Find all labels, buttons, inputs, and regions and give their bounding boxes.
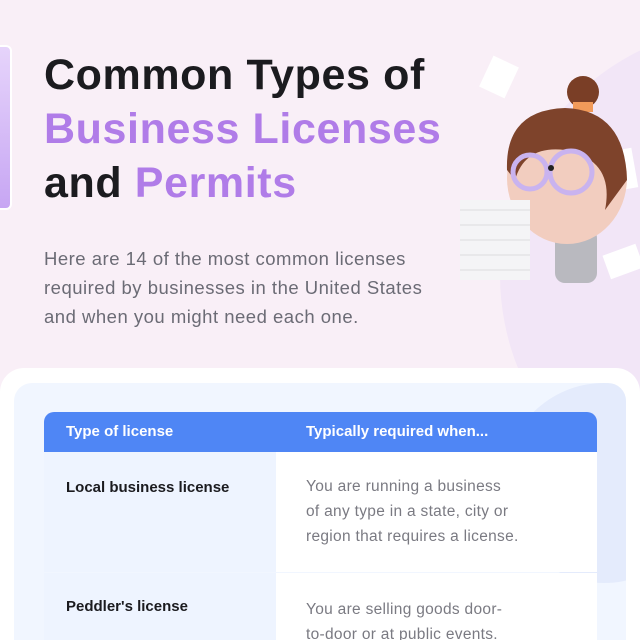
table header: Typically required when... (306, 423, 488, 440)
row: local business license: You are running a business (306, 478, 501, 495)
title: Business Licenses (44, 105, 441, 153)
intro text: Here are 14 of the most common licenses (44, 248, 406, 269)
row: local business license: region that requires a license. (306, 528, 519, 545)
inner panel (14, 383, 626, 640)
row: local business license: of any type in a state, city or (306, 503, 508, 520)
table (44, 412, 597, 640)
title: Common Types of (44, 51, 425, 99)
side accent bar (0, 45, 12, 210)
row: peddler's license: Peddler's license (66, 598, 188, 615)
background arc (500, 25, 640, 525)
intro text (44, 248, 422, 327)
illustration: character with papers (460, 56, 640, 283)
table card (0, 368, 640, 640)
row: local business license (44, 452, 597, 572)
intro text: required by businesses in the United States (44, 277, 422, 298)
row: local business license: Local business license (66, 479, 229, 496)
row: peddler's license: You are selling goods door- (306, 601, 502, 618)
table header (44, 412, 597, 452)
table header: Type of license (66, 423, 173, 440)
title: and Permits (44, 159, 297, 207)
row: peddler's license (66, 573, 597, 640)
title (44, 51, 441, 207)
intro text: and when you might need each one. (44, 306, 359, 327)
